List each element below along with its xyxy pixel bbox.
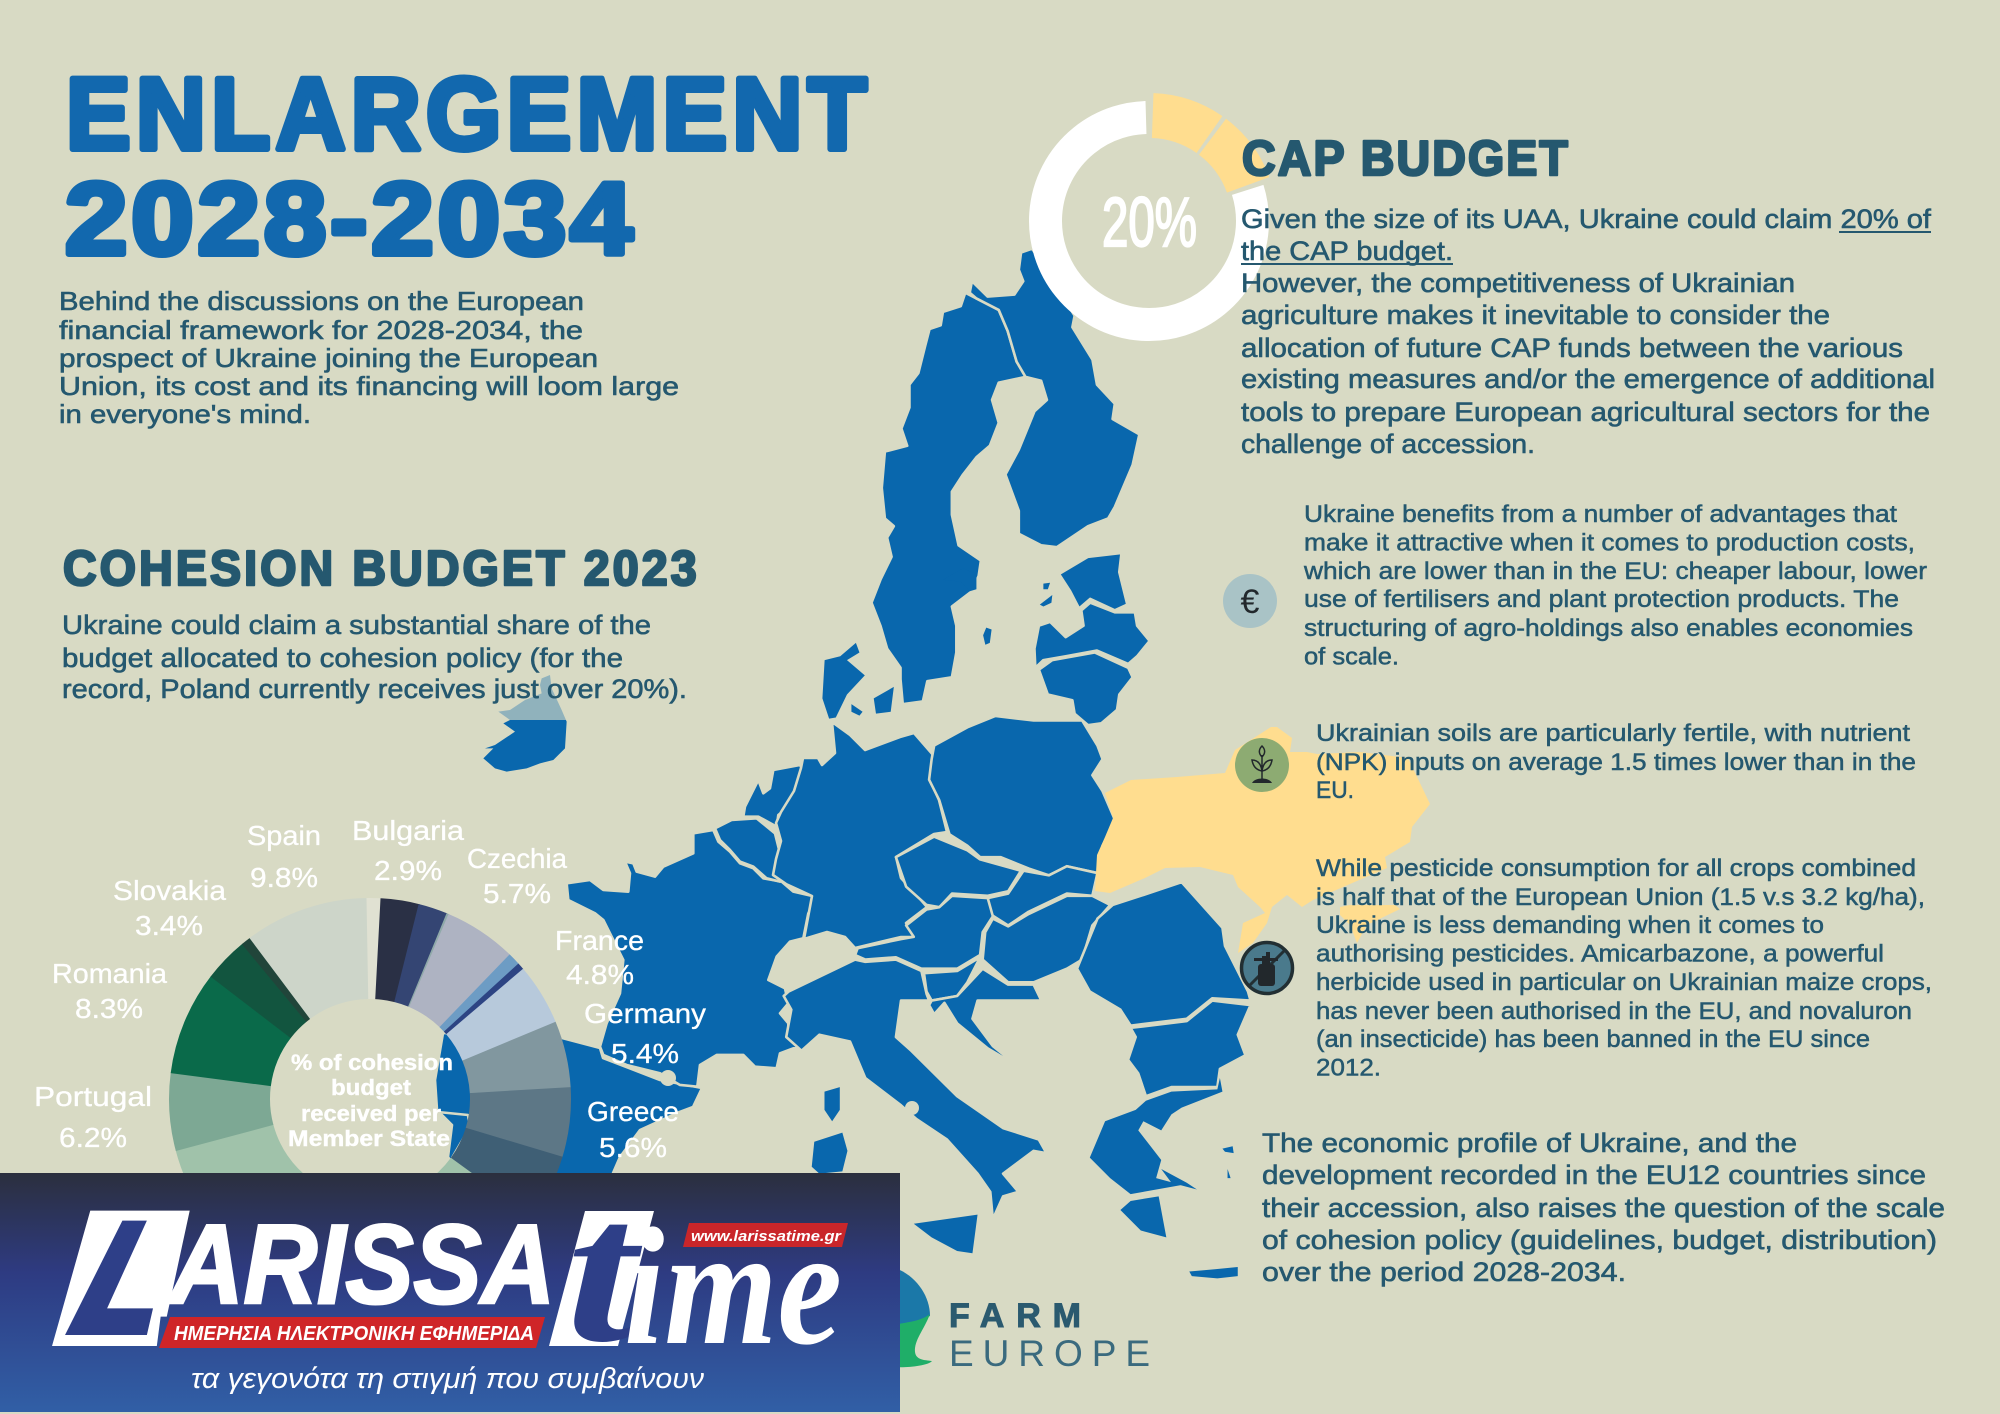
banner website tag (683, 1223, 848, 1247)
heading: cohesion budget: COHESION BUDGET 2023 (63, 542, 697, 596)
text: soils: EU. (1316, 777, 1354, 804)
donut labels (34, 815, 706, 1163)
text: production costs: use of fertilisers and plant protection products. The (1304, 586, 1899, 613)
donut labels: Romania (52, 958, 167, 989)
banner wordmark time (549, 1158, 842, 1385)
text: production costs: which are lower than in the EU: cheaper labour, lower (1303, 558, 1927, 585)
text: pesticides: has never been authorised in the EU, and novaluron (1316, 998, 1912, 1025)
icon: euro: € (1241, 583, 1260, 621)
main title: 2028-2034 (65, 162, 633, 276)
CAP text: tools to prepare European agricultural sectors for the (1241, 397, 1930, 427)
donut labels: Greece (587, 1096, 679, 1127)
main title: ENLARGEMENT (66, 58, 867, 172)
map: Ireland (483, 675, 567, 772)
text: soils: (NPK) inputs on average 1.5 times lower than in the (1316, 749, 1916, 776)
donut labels: 6.2% (59, 1122, 127, 1153)
donut labels: Czechia (467, 843, 567, 874)
text: pesticides: herbicide used in particular on Ukrainian maize crops, (1316, 969, 1932, 996)
donut labels: 5.7% (483, 878, 551, 909)
map: Rome and Andorra cut-outs (660, 1070, 919, 1115)
donut labels: Portugal (34, 1081, 152, 1112)
text: pesticides (1316, 855, 1932, 1082)
text: pesticides: (an insecticide) has been banned in the EU since (1316, 1026, 1870, 1053)
donut centre label: Member State (288, 1126, 450, 1151)
donut labels: 3.4% (135, 910, 203, 941)
icon: euro (1223, 574, 1277, 628)
donut labels: 5.4% (611, 1038, 679, 1069)
donut chart: cohesion budget per Member State (157, 886, 583, 1312)
intro text: Union, its cost and its financing will loom large (59, 371, 679, 401)
CAP text: existing measures and/or the emergence of additional (1241, 364, 1935, 394)
text: economic profile (1262, 1128, 1945, 1287)
donut labels: France (555, 925, 644, 956)
text: pesticides: 2012. (1316, 1054, 1381, 1082)
cohesion text: Ukraine could claim a substantial share of the (62, 610, 651, 640)
translucent box behind the cohesion text (52, 612, 720, 720)
banner wordmark time: ime (624, 1194, 842, 1380)
CAP donut: 20% (1001, 73, 1297, 369)
text: economic profile: their accession, also raises the question of the scale (1262, 1193, 1945, 1223)
donut labels: Bulgaria (352, 815, 464, 846)
donut centre label: received per (301, 1101, 441, 1126)
heading: CAP budget: CAP BUDGET (1242, 132, 1568, 186)
donut labels: 8.3% (75, 993, 143, 1024)
donut labels: 2.9% (374, 855, 442, 886)
logo: Farm Europe: EUROPE (949, 1333, 1150, 1374)
donut centre label (288, 1050, 453, 1151)
CAP text: agriculture makes it inevitable to consider the (1241, 300, 1830, 330)
banner wordmark ARISSA: ARISSA (167, 1202, 555, 1327)
icon: banned sprayer (1242, 942, 1292, 994)
text: soils (1316, 720, 1916, 804)
logo: Farm Europe (895, 1268, 1150, 1374)
banner website tag: www.larissatime.gr (691, 1228, 842, 1245)
text: pesticides: is half that of the European Union (1.5 v.s 3.2 kg/ha), (1316, 884, 1925, 911)
icon: plant (1235, 738, 1289, 792)
donut labels: 5.6% (599, 1132, 667, 1163)
CAP text (1241, 204, 1935, 459)
text: production costs: of scale. (1304, 644, 1399, 670)
donut centre label: budget (331, 1075, 412, 1100)
donut centre label: % of cohesion (291, 1050, 453, 1075)
donut labels: 9.8% (250, 862, 318, 893)
text: production costs: make it attractive when it comes to production costs, (1304, 530, 1915, 556)
text: pesticides: While pesticide consumption for all crops combined (1316, 855, 1916, 882)
text: production costs (1303, 501, 1927, 670)
CAP text: challenge of accession. (1241, 429, 1535, 459)
CAP text: However, the competitiveness of Ukrainian (1241, 268, 1795, 298)
cohesion text: budget allocated to cohesion policy (for the (62, 643, 623, 673)
text: economic profile: of cohesion policy (guidelines, budget, distribution) (1262, 1225, 1937, 1255)
intro text: prospect of Ukraine joining the European (59, 343, 598, 373)
banner subtitle tag (159, 1317, 545, 1348)
text: economic profile: The economic profile of Ukraine, and the (1262, 1128, 1797, 1158)
banner: Larissa Time (0, 1158, 900, 1412)
main title (65, 58, 867, 276)
intro text: in everyone's mind. (59, 399, 311, 429)
map: Portugal border (438, 1112, 470, 1158)
map of the European Union (435, 249, 1251, 1278)
map: Germany (773, 722, 947, 948)
cohesion text: record, Poland currently receives just over 20%). (62, 674, 687, 704)
CAP text: Given the size of its UAA, Ukraine could claim 20% of (1241, 204, 1932, 234)
banner tagline: τα γεγονότα τη στιγμή που συμβαίνουν (191, 1363, 705, 1395)
banner logo letter L (52, 1211, 190, 1346)
logo: Farm Europe: FARM (949, 1297, 1084, 1335)
intro text (59, 286, 679, 429)
text: pesticides: authorising pesticides. Amicarbazone, a powerful (1316, 940, 1884, 968)
text: economic profile: over the period 2028-2034. (1262, 1257, 1626, 1287)
text: soils: Ukrainian soils are particularly fertile, with nutrient (1316, 720, 1910, 747)
text: pesticides: Ukraine is less demanding when it comes to (1316, 912, 1824, 939)
CAP text: allocation of future CAP funds between the various (1241, 333, 1903, 363)
text: production costs: Ukraine benefits from a number of advantages that (1304, 501, 1897, 528)
map: France and Benelux (567, 765, 818, 1087)
donut labels: Germany (584, 998, 706, 1029)
map: Iberia (435, 1033, 702, 1180)
banner subtitle tag: ΗΜΕΡΗΣΙΑ ΗΛΕΚΤΡΟΝΙΚΗ ΕΦΗΜΕΡΙΔΑ (174, 1323, 534, 1345)
donut labels: Slovakia (113, 875, 226, 906)
map: Ukraine (1095, 727, 1430, 953)
text: production costs: structuring of agro-holdings also enables economies (1304, 615, 1913, 642)
cohesion text (62, 610, 687, 704)
map: central and southern Europe (784, 716, 1251, 1278)
text: economic profile: development recorded in the EU12 countries since (1262, 1160, 1926, 1190)
donut labels: 4.8% (566, 959, 634, 990)
CAP text: the CAP budget. (1241, 236, 1453, 266)
CAP donut: 20%: 20% (1102, 183, 1197, 261)
map: Nordic and Baltic countries (822, 249, 1150, 725)
banner wordmark time: t (566, 1158, 643, 1385)
donut labels: Spain (247, 820, 321, 851)
intro text: Behind the discussions on the European (59, 286, 584, 316)
intro text: financial framework for 2028-2034, the (59, 315, 583, 345)
